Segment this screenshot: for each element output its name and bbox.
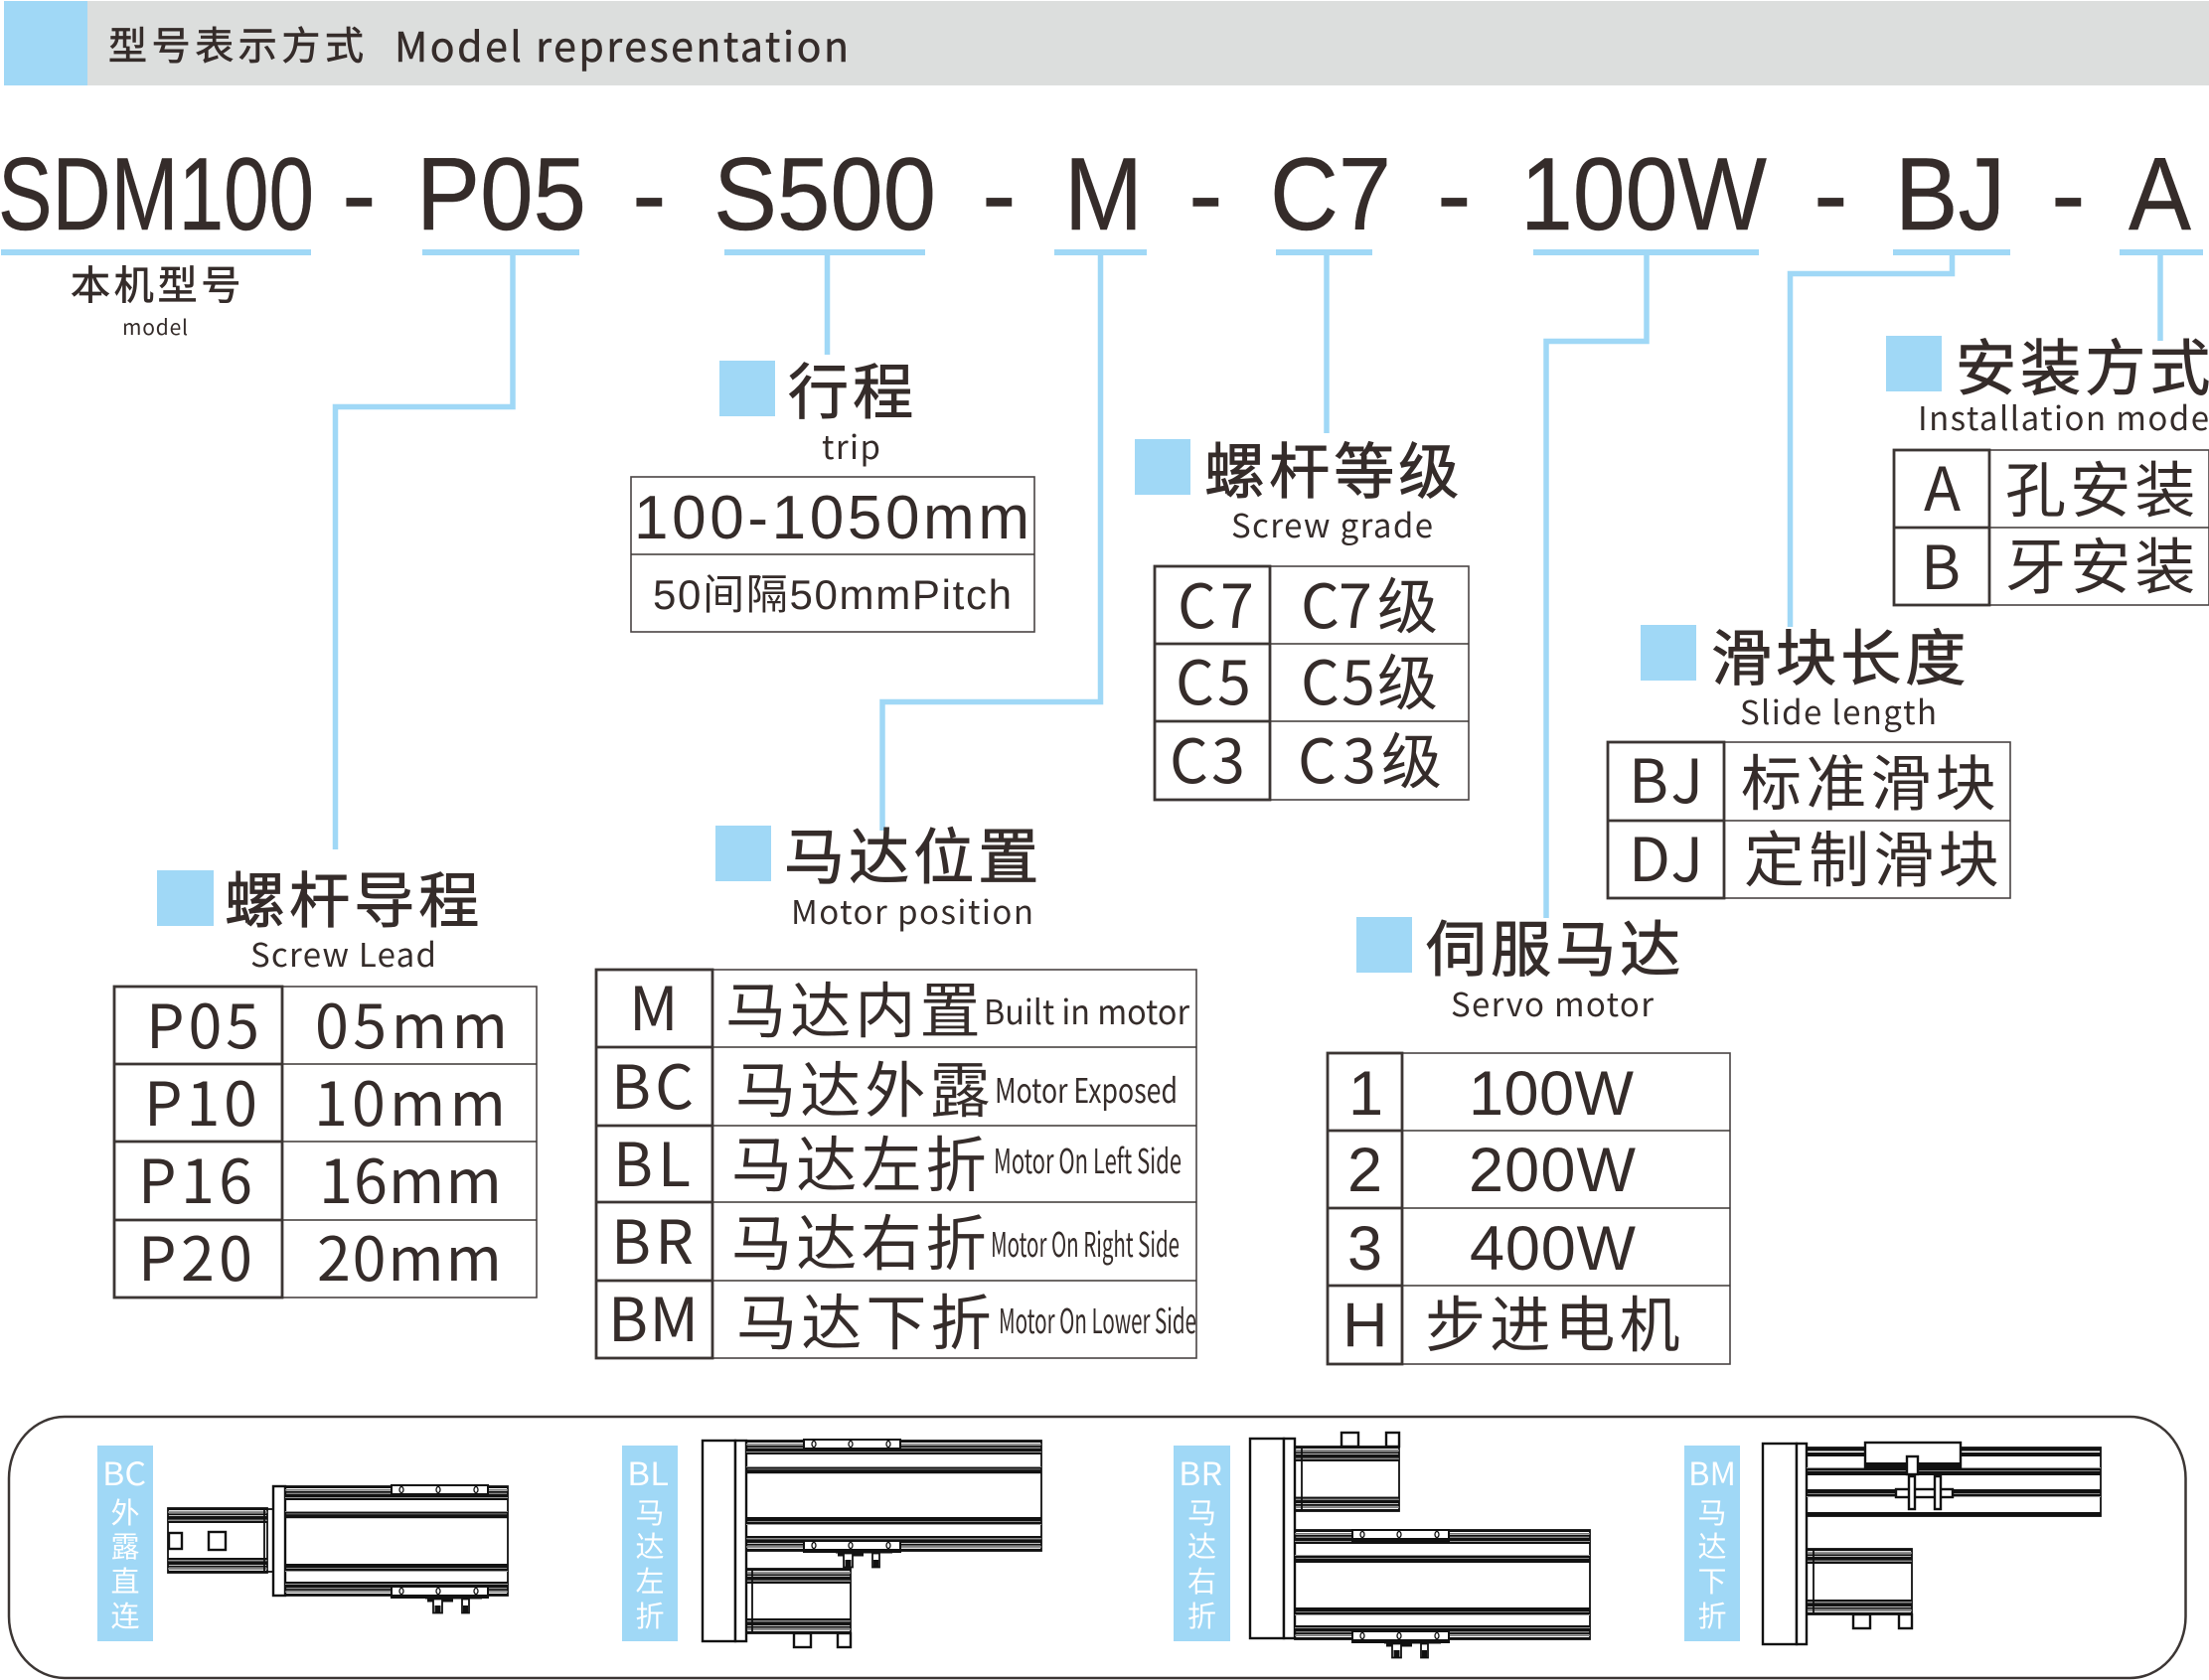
heading: Installation mode <box>1918 392 2209 440</box>
table: servo motor: 步进电机 <box>1425 1276 1684 1364</box>
label: BR <box>1174 1446 1230 1641</box>
table: slide length: BJ <box>1629 732 1703 821</box>
separator: - <box>982 137 1017 252</box>
code: 100W: 100W <box>1520 137 1767 252</box>
table: motor position <box>596 960 1196 1362</box>
drawing: motor exposed <box>168 1485 508 1613</box>
separator: - <box>1814 137 1848 252</box>
table: motor position: Motor On Right Side <box>991 1218 1180 1267</box>
heading: 行程 <box>788 343 917 431</box>
drawing: motor on right side <box>1250 1433 1590 1657</box>
label: BR: 折 <box>1187 1594 1216 1635</box>
code: P05: P05 <box>416 137 586 252</box>
table: installation mode <box>1894 440 2209 607</box>
table: screw grade: C7 <box>1178 557 1254 646</box>
header title <box>108 14 849 74</box>
label: BR: 右 <box>1187 1559 1216 1601</box>
header title: Model representation <box>394 14 849 74</box>
table: servo motor: 200W <box>1469 1136 1637 1205</box>
heading: trip <box>822 421 880 469</box>
drawing: motor on lower side <box>1763 1443 2101 1644</box>
table: slide length: 定制滑块 <box>1744 811 2003 899</box>
label: BL: 折 <box>636 1594 665 1635</box>
label: BC: BC <box>102 1450 146 1495</box>
code underlines <box>1 249 2203 255</box>
heading square <box>1135 439 1190 495</box>
label: BC: 外 <box>111 1490 140 1532</box>
rounded outline <box>9 1417 2186 1678</box>
table: motor position: M <box>629 960 679 1048</box>
table: screw lead: 20mm <box>317 1210 502 1298</box>
table: screw lead: 16mm <box>319 1133 502 1221</box>
heading: 螺杆等级 <box>1204 422 1463 511</box>
code: SDM100: SDM100 <box>0 137 314 252</box>
label: BL: BL <box>627 1450 669 1495</box>
table: trip: 100-1050mm <box>634 484 1029 552</box>
code: S500: S500 <box>713 137 936 252</box>
table: screw grade: C3级 <box>1298 712 1442 801</box>
label: BL: 左 <box>636 1559 665 1601</box>
table: servo motor: 1 <box>1348 1059 1383 1129</box>
table: installation mode: A <box>1924 440 1961 529</box>
heading: Servo motor <box>1451 979 1654 1026</box>
table: motor position: BR <box>611 1193 694 1282</box>
model code row <box>0 137 2192 252</box>
table: screw grade <box>1155 557 1469 801</box>
code: C7: C7 <box>1270 137 1391 252</box>
heading: 安装方式 <box>1956 319 2209 407</box>
table: servo motor: H <box>1342 1291 1387 1360</box>
panel: motor variants <box>9 1417 2186 1678</box>
table: screw grade: C5 <box>1176 634 1251 722</box>
separator: - <box>342 137 377 252</box>
connector: A to installation mode <box>2157 255 2163 341</box>
heading square <box>1641 625 1696 681</box>
label: BL <box>622 1446 678 1641</box>
table: screw lead: P16 <box>138 1133 252 1221</box>
panel: screw grade <box>1135 422 1469 801</box>
label: model <box>71 253 244 342</box>
code: M: M <box>1064 137 1143 252</box>
heading square <box>157 870 214 926</box>
table: servo motor: 2 <box>1347 1136 1382 1205</box>
table: motor position: 马达外露 <box>735 1041 995 1130</box>
drawing: motor on left side <box>703 1440 1041 1647</box>
label: BC: 露 <box>111 1524 140 1566</box>
panel: trip <box>631 343 1034 632</box>
code: BJ: BJ <box>1895 137 2005 252</box>
connector: 100W to servo motor <box>1546 255 1647 918</box>
label: model: 本机型号 <box>71 253 244 311</box>
table: motor position: Motor On Lower Side <box>999 1295 1196 1343</box>
table: installation mode: 孔安装 <box>2005 441 2200 530</box>
heading square <box>719 361 775 416</box>
label: BM: BM <box>1688 1450 1736 1495</box>
header bar <box>4 1 2209 85</box>
label: BC: 连 <box>111 1594 140 1635</box>
label: BM: 折 <box>1697 1594 1727 1635</box>
panel: servo motor <box>1328 900 1730 1364</box>
connector: BJ to slide length <box>1791 255 1952 627</box>
panel: motor position <box>596 808 1196 1362</box>
heading: 螺杆导程 <box>225 851 483 940</box>
table: slide length: 标准滑块 <box>1741 734 2000 823</box>
table: screw grade: C5级 <box>1301 634 1438 722</box>
heading: Screw Lead <box>250 929 436 977</box>
table: screw lead: 05mm <box>315 978 508 1066</box>
table: trip: 50间隔50mmPitch <box>653 571 1012 618</box>
label: BM: 达 <box>1697 1524 1727 1566</box>
table: motor position: 马达右折 <box>731 1194 991 1283</box>
separator: - <box>2051 137 2086 252</box>
heading <box>1918 319 2209 440</box>
heading: Motor position <box>791 886 1033 934</box>
connector: M to motor position <box>882 255 1101 831</box>
heading: Slide length <box>1740 687 1937 734</box>
table: screw lead: 10mm <box>314 1055 506 1144</box>
connector: P05 to screw lead <box>336 255 513 849</box>
table: screw lead: P10 <box>144 1055 257 1144</box>
table: motor position: BL <box>613 1116 691 1204</box>
heading square <box>715 826 771 881</box>
table: motor position: 马达左折 <box>731 1116 991 1204</box>
table: motor position: Motor On Left Side <box>994 1135 1182 1183</box>
table: installation mode: B <box>1921 519 1961 607</box>
panel: screw lead <box>114 851 537 1298</box>
table: motor position: 马达内置 <box>725 962 985 1050</box>
table: trip <box>631 477 1034 632</box>
panel: slide length <box>1608 609 2010 899</box>
separator: - <box>632 137 667 252</box>
table: slide length: DJ <box>1629 811 1703 899</box>
table: screw grade: C3 <box>1170 712 1245 801</box>
label: BR: 达 <box>1187 1524 1216 1566</box>
table: screw grade: C7级 <box>1301 557 1438 646</box>
table: installation mode: 牙安装 <box>2005 518 2200 606</box>
table: servo motor: 400W <box>1470 1214 1637 1284</box>
label: model: model <box>122 312 188 342</box>
table: motor position: Built in motor <box>984 986 1190 1034</box>
table: motor position: BC <box>611 1038 694 1127</box>
label: BC: 直 <box>111 1559 140 1601</box>
separator: - <box>1188 137 1223 252</box>
connector: C7 to screw grade <box>1324 255 1330 433</box>
label: BR: 马 <box>1187 1490 1216 1532</box>
heading: 伺服马达 <box>1426 900 1684 989</box>
table: motor position: BM <box>608 1271 699 1359</box>
heading: Screw grade <box>1231 500 1433 547</box>
table: screw lead: P20 <box>138 1210 252 1298</box>
label: BL: 达 <box>636 1524 665 1566</box>
table: servo motor: 100W <box>1469 1059 1635 1129</box>
panel: installation mode <box>1886 319 2209 607</box>
label: BM <box>1684 1446 1740 1641</box>
label: BM: 下 <box>1697 1559 1727 1601</box>
table: servo motor <box>1328 1053 1730 1364</box>
table: motor position: 马达下折 <box>736 1274 996 1362</box>
label: BR: BR <box>1179 1450 1222 1495</box>
label: BL: 马 <box>636 1490 665 1532</box>
table: servo motor: 3 <box>1347 1214 1382 1284</box>
code: A: A <box>2129 137 2192 252</box>
table: screw lead: P05 <box>146 978 259 1066</box>
table: screw lead <box>114 978 537 1298</box>
table: motor position: Motor Exposed <box>995 1064 1178 1113</box>
connector: S500 to trip <box>825 255 830 355</box>
heading: 滑块长度 <box>1711 609 1970 697</box>
separator: - <box>1437 137 1472 252</box>
heading: 马达位置 <box>784 808 1042 896</box>
heading square <box>1886 336 1942 391</box>
label: BM: 马 <box>1697 1490 1727 1532</box>
header title: 型号表示方式 <box>108 16 369 72</box>
heading square <box>1356 917 1412 973</box>
table: slide length <box>1608 732 2010 899</box>
label: BC <box>97 1446 153 1641</box>
